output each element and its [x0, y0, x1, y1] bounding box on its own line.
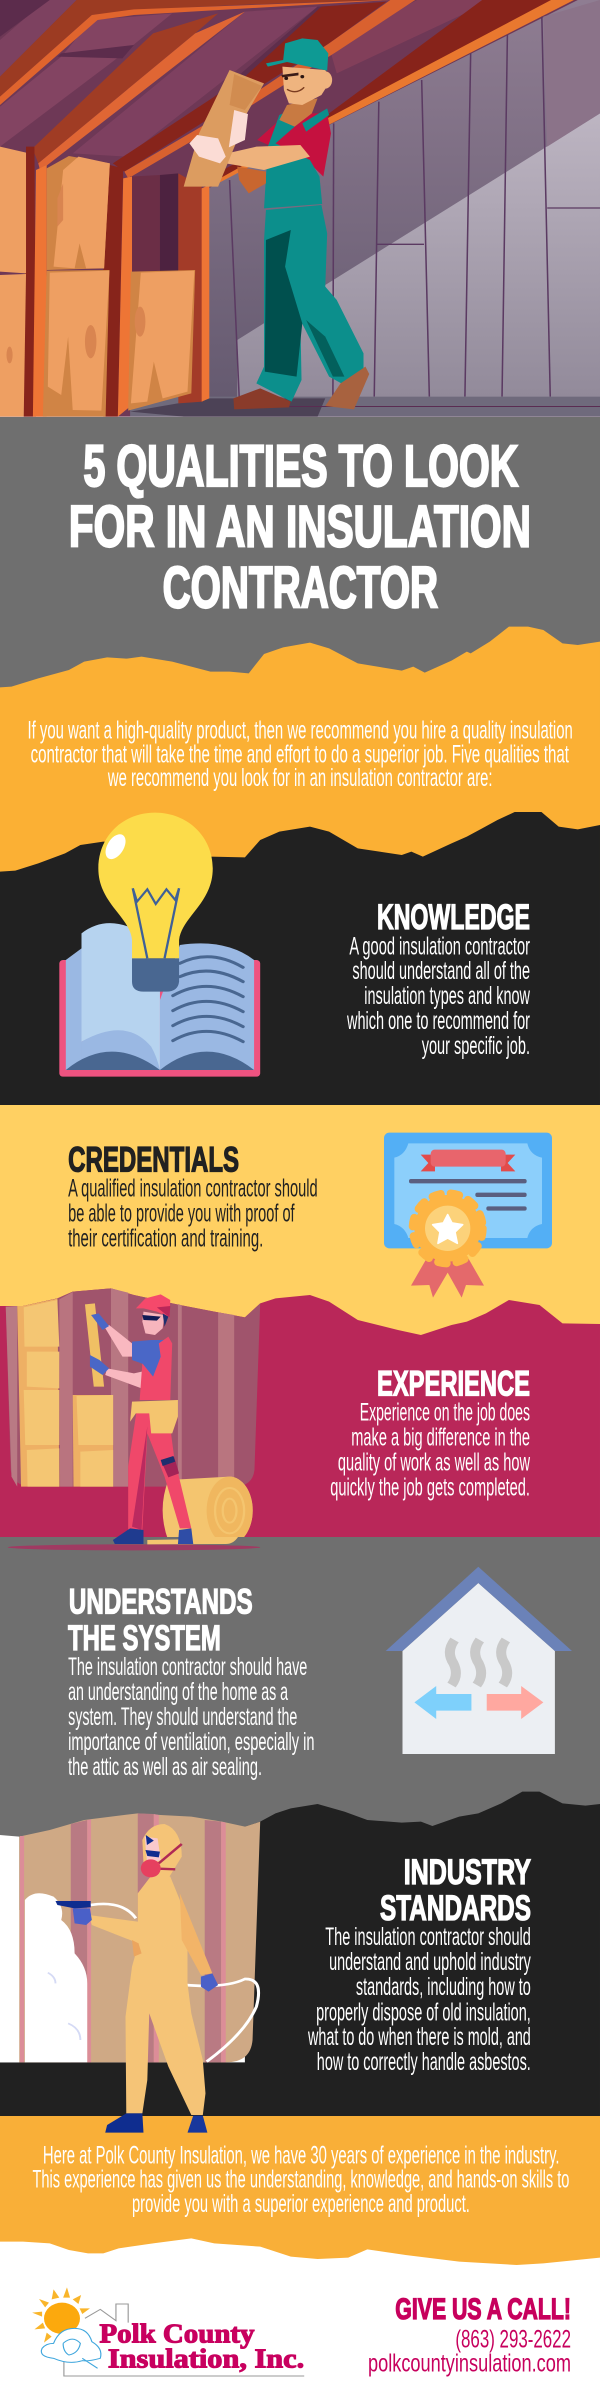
- insulation batts and studs: [0, 147, 209, 417]
- attic rafters: [0, 0, 574, 187]
- text: credentials: their certification and training.: [68, 1225, 263, 1253]
- panel: industry standards background: [0, 1792, 600, 2116]
- text: knowledge: [346, 932, 531, 1060]
- logo: Polk County Insulation: Insulation, Inc.: [108, 2343, 304, 2373]
- text: credentials: be able to provide you with proof of: [68, 1200, 295, 1228]
- worker in green overalls: [184, 38, 369, 409]
- heading: industry standards: [380, 1853, 531, 1928]
- text: industry standards: [307, 1923, 531, 2076]
- closing text: [32, 2141, 569, 2218]
- heading: credentials: CREDENTIALS: [68, 1141, 239, 1180]
- icon: worker with insulation roll: [6, 1288, 260, 1545]
- icon: house ventilation: [386, 1567, 572, 1754]
- title: [69, 434, 531, 620]
- heading: experience: EXPERIENCE: [377, 1365, 530, 1404]
- hero illustration: worker installing attic insulation: [0, 0, 600, 417]
- text: credentials: A qualified insulation contractor should: [68, 1175, 318, 1203]
- text: understands the system: the attic as well as air sealing.: [68, 1753, 262, 1781]
- icon: worker spraying foam insulation: [0, 1813, 260, 2115]
- heading: understands the system: UNDERSTANDS: [69, 1582, 253, 1621]
- text: understands the system: [68, 1653, 314, 1781]
- panel: knowledge background: [0, 812, 600, 1105]
- heading: understands the system: [68, 1582, 253, 1658]
- wall panels: [130, 0, 600, 417]
- panel: closing orange band: [0, 2116, 600, 2276]
- icon: light bulb and open book: [59, 813, 260, 1077]
- contact: call to action: [368, 2293, 571, 2378]
- heading: industry standards: STANDARDS: [380, 1889, 531, 1928]
- text: understands the system: an understanding of the home as a: [68, 1678, 288, 1706]
- worker boots overlapping closing band: [105, 2113, 207, 2133]
- text: experience: [330, 1399, 531, 1502]
- heading: understands the system: THE SYSTEM: [68, 1619, 221, 1658]
- panel: experience background: [0, 1288, 600, 1537]
- logo: Polk County Insulation: [32, 2287, 304, 2376]
- footer torn white panel: [0, 2238, 600, 2400]
- heading: industry standards: INDUSTRY: [404, 1853, 531, 1892]
- floor shadow, roll base and worker boots over gray panel: [8, 1528, 260, 1550]
- intro torn orange panel: [0, 627, 600, 900]
- title: CONTRACTOR: [163, 555, 438, 620]
- text: understands the system: The insulation contractor should have: [68, 1653, 307, 1681]
- panel: credentials background: [0, 1105, 600, 1360]
- panel: understands the system background: [0, 1537, 600, 1910]
- text: understands the system: system. They should understand the: [68, 1703, 297, 1731]
- icon: certificate with medal: [384, 1133, 552, 1298]
- text: understands the system: importance of ventilation, especially in: [68, 1728, 314, 1756]
- logo: Polk County Insulation: Polk County: [100, 2319, 255, 2349]
- text: credentials: [68, 1175, 318, 1253]
- title panel background: [0, 417, 600, 737]
- intro text: [28, 716, 573, 792]
